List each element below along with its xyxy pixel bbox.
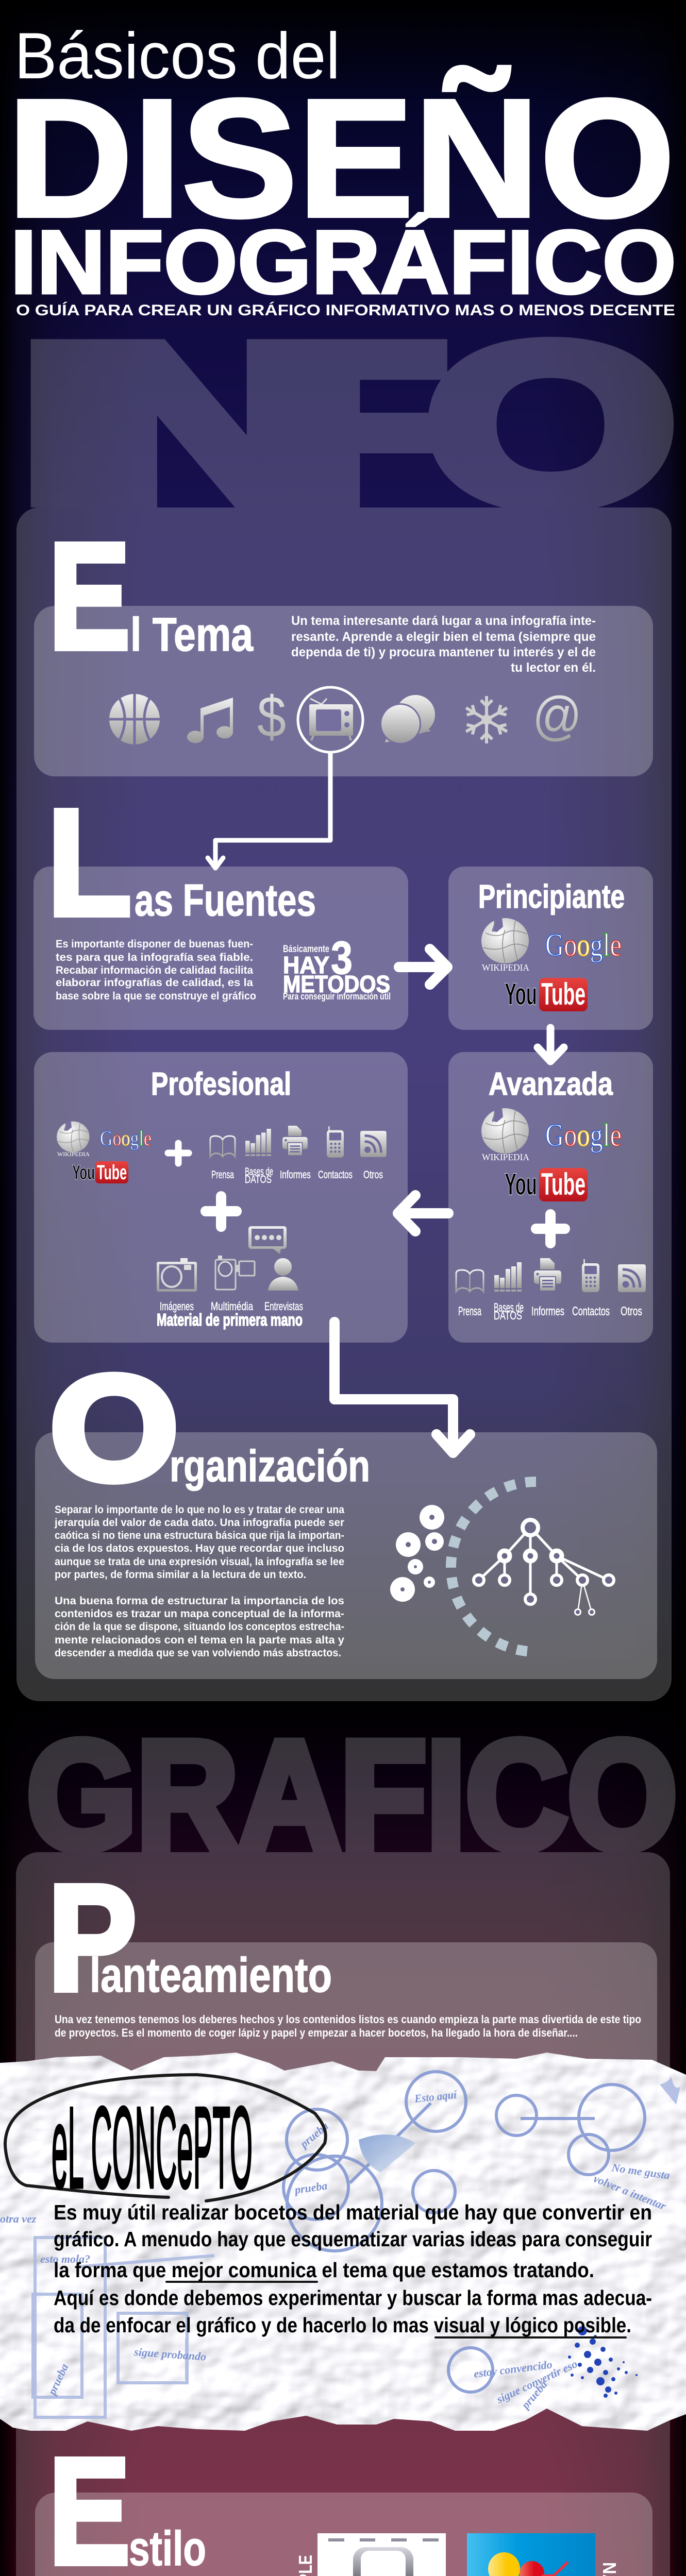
heading: el concepto with hand-drawn outline (5, 2075, 326, 2212)
panel: estilo (35, 2426, 652, 2576)
text: el tema description (291, 614, 596, 675)
labels: sources row: Otros (363, 1169, 383, 1181)
arrow: profesional to organización (334, 1322, 470, 1453)
labels: sources row (211, 1166, 383, 1185)
text: fuentes description: tes para que la infografía sea fiable. (56, 952, 253, 963)
text: organización paragraphs: contenidos es trazar un mapa conceptual de la informa- (55, 1608, 344, 1620)
text: organización paragraphs: por partes, de forma similar a la lectura de un texto. (55, 1569, 306, 1581)
text: organización paragraphs: cia de los datos expuestos. Hay que recordar que incluso (55, 1543, 344, 1554)
text: organización paragraphs: mente relacionados con el tema en la parte mas alta y (55, 1634, 344, 1646)
callout: hay 3 metodos (283, 933, 391, 1002)
heading: El Tema: E (48, 511, 130, 681)
title line: DISEÑO: DISEÑO (7, 64, 675, 252)
text: el tema description: dependa de ti) y procura mantener tu interés y el de (291, 645, 596, 659)
heading: Las Fuentes: as Fuentes (135, 875, 316, 925)
ghost heading: INFO: F (301, 298, 448, 551)
template: apple (295, 2533, 446, 2576)
heading: Las Fuentes (47, 777, 316, 947)
subtitle: O GUÍA PARA CREAR UN GRÁFICO INFORMATIVO MAS O MENOS DECENTE (16, 301, 675, 319)
labels: sources row: Informes (531, 1304, 564, 1318)
sketches: handwritten notes: Esto aquí (413, 2088, 458, 2105)
logo: youtube (505, 977, 588, 1011)
panel: crumpled paper sheet (0, 2053, 686, 2431)
diagram: scattered data circles (390, 1505, 444, 1602)
labels: sources row (458, 1301, 642, 1322)
sketches: handwritten notes: No me gusta (610, 2161, 671, 2182)
arrow: tema to fuentes (208, 753, 330, 868)
labels: sources row: Contactos (572, 1304, 610, 1318)
heading: Organización (49, 1345, 370, 1512)
icons: sources row (210, 1126, 387, 1158)
logo: google: Google (100, 1126, 152, 1150)
icon: video camera (215, 1256, 255, 1290)
labels: sources row: DATOS (494, 1309, 522, 1322)
sketches: handwritten notes: prueba (293, 2179, 328, 2196)
labels: sources row: Informes (280, 1169, 311, 1181)
text: fuentes description: base sobre la que se construye el gráfico (56, 990, 256, 1002)
sketches: ink splatter (568, 2326, 638, 2398)
panel: avanzada (448, 1052, 653, 1343)
logo: wikipedia: WIKIPEDIA (482, 1152, 529, 1162)
labels: first-hand material: Multimédia (211, 1300, 254, 1313)
heading: profesional: Profesional (151, 1066, 291, 1102)
logo: youtube: Tube (97, 1161, 127, 1184)
arrow: fuentes to principiante (399, 949, 447, 985)
sketches: handwritten notes: prueba (45, 2362, 71, 2398)
labels: sources row: Prensa (458, 1304, 481, 1318)
icon: speech bubble (248, 1226, 287, 1254)
sketches: handwritten notes: prueba (297, 2120, 331, 2151)
labels: first-hand material (157, 1300, 303, 1329)
logo: wikipedia: WIKIPEDIA (57, 1150, 90, 1158)
ghost heading: INFO (31, 337, 674, 507)
text: el tema description: resante. Aprende a elegir bien el tema (siempre que (291, 630, 596, 644)
logo: wikipedia (481, 918, 529, 973)
text: organización paragraphs: jerarquía del valor de cada dato. Una infografía puede ser (54, 1517, 344, 1529)
labels: first-hand material: Material de primera mano (157, 1310, 303, 1329)
arrow: principiante to avanzada (538, 1028, 564, 1061)
logo: youtube: You (505, 977, 537, 1011)
text: organización paragraphs: Separar lo importante de lo que no lo es y tratar de crear una (55, 1504, 344, 1516)
heading: Estilo: stilo (129, 2521, 206, 2576)
logo: youtube: Tube (541, 1167, 585, 1201)
ghost heading: INFO: N (79, 298, 325, 551)
panel: profesional (34, 1052, 408, 1343)
panel: principiante (448, 867, 653, 1030)
text: el tema description: tu lector en él. (511, 660, 596, 675)
text: organización paragraphs: aunque se trata de una expresión visual, la infografía se lee (55, 1556, 344, 1568)
labels: sources row: Bases de (494, 1301, 524, 1315)
heading: principiante: Principiante (478, 878, 625, 915)
callout: hay 3 metodos: Para conseguir información útil (283, 991, 391, 1002)
icon: speech bubbles (380, 695, 435, 744)
icons: sources row (456, 1258, 646, 1292)
sketches: handwritten notes: sigue convertir eso (494, 2357, 579, 2406)
heading: avanzada: Avanzada (489, 1066, 613, 1102)
text: organización paragraphs: ción de la que se dispone, situando los conceptos estrecha- (55, 1621, 344, 1633)
sketches: handwritten notes: otra vez (0, 2212, 37, 2225)
heading: El Tema: l Tema (130, 608, 254, 661)
diagram: hierarchy tree (474, 1520, 614, 1615)
text: el tema description: Un tema interesante dará lugar a una infografía inte- (291, 614, 596, 628)
icon: snowflake (463, 696, 510, 743)
text: fuentes description (56, 938, 256, 1002)
text: fuentes description: elaborar infografías de calidad, es la (56, 977, 253, 989)
panel: organización (35, 1345, 657, 1679)
logo: google: Google (545, 1118, 622, 1153)
panel: planteamiento (35, 1853, 657, 2087)
panel: grafico outer container (16, 1852, 670, 2576)
labels: first-hand material: Imágenes (160, 1300, 194, 1313)
arrow: avanzada to profesional (398, 1195, 448, 1231)
icon: basketball (109, 694, 160, 744)
text: organización paragraphs: Una buena forma de estructurar la importancia de los (55, 1595, 344, 1607)
panel: el tema (34, 511, 653, 776)
logo: youtube: You (72, 1161, 95, 1184)
panel: info outer container (16, 507, 672, 1701)
text: organización paragraphs: descender a medida que se van volviendo más abstractos. (55, 1647, 341, 1659)
heading: Las Fuentes: L (47, 777, 132, 947)
logo: youtube: Tube (541, 977, 585, 1011)
heading: Organización: O (49, 1345, 179, 1512)
text: organización paragraphs: caótica si no tiene una estructura básica que rija la importan- (55, 1530, 344, 1541)
diagram: dashed arc (451, 1482, 536, 1652)
ghost heading: INFO: O (426, 298, 676, 551)
callout: hay 3 metodos: HAY (283, 952, 329, 978)
callout: hay 3 metodos: 3 (331, 933, 353, 984)
sketches: handwritten notes: prueba (518, 2378, 550, 2412)
icon: dollar: $ (257, 685, 286, 749)
icon: person (268, 1258, 298, 1291)
icon: big plus (206, 1196, 237, 1227)
labels: sources row: Otros (621, 1304, 642, 1318)
sketches: handwritten notes (0, 2088, 671, 2412)
logo: wikipedia (481, 1108, 529, 1162)
labels: first-hand material: Entrevistas (264, 1300, 303, 1313)
sketches: blue pencil marks (33, 2072, 680, 2417)
heading: Estilo (48, 2426, 206, 2576)
labels: sources row: Bases de (245, 1166, 273, 1178)
icon: plus (536, 1214, 565, 1243)
icon: television highlighted (298, 687, 363, 752)
panel: las fuentes (34, 777, 408, 1030)
template: naif (467, 2533, 620, 2576)
labels: sources row: DATOS (245, 1174, 272, 1185)
heading: Organización: rganización (170, 1442, 370, 1491)
callout: hay 3 metodos: Básicamente (283, 944, 329, 955)
labels: sources row: Prensa (211, 1169, 234, 1181)
title line: Básicos del: Básicos del (14, 19, 340, 92)
heading: Planteamiento (47, 1853, 332, 2023)
ghost heading: INFO: I (21, 298, 103, 551)
sketches: handwritten notes: estoy convencido (473, 2358, 553, 2380)
logo: youtube: You (505, 1167, 537, 1201)
logo: youtube (505, 1167, 588, 1201)
heading: Planteamiento: P (47, 1853, 137, 2023)
logo: google: Google (545, 928, 622, 963)
heading: Planteamiento: lanteamiento (90, 1948, 332, 2003)
callout: hay 3 metodos: METODOS (283, 971, 390, 997)
icon: at sign: @ (532, 686, 582, 746)
text: planteamiento intro (55, 2013, 641, 2039)
text: organización paragraphs (54, 1504, 344, 1659)
icon: plus (168, 1143, 189, 1163)
sketches: handwritten notes: volver a intentar (592, 2172, 668, 2213)
sketches: handwritten notes: sigue probando (133, 2345, 207, 2363)
title line: INFOGRÁFICO: INFOGRÁFICO (10, 212, 676, 313)
icon: music note (187, 698, 233, 743)
sketches: handwritten notes: esto mola? (40, 2252, 90, 2265)
text: fuentes description: Es importante disponer de buenas fuen- (56, 938, 253, 950)
icon: camera (157, 1258, 197, 1292)
logo: wikipedia: WIKIPEDIA (482, 962, 529, 973)
labels: sources row: Contactos (318, 1169, 353, 1181)
logo: wikipedia (57, 1121, 90, 1158)
text: planteamiento intro: de proyectos. Es el momento de coger lápiz y papel y empezar a hacer bocetos, ha llegado la hora de diseñar.... (55, 2026, 578, 2039)
logo: youtube (72, 1161, 128, 1184)
title (7, 19, 676, 319)
text: fuentes description: Recabar información de calidad facilita (56, 964, 253, 976)
heading: El Tema (48, 511, 254, 681)
text: concepto body: la forma que mejor comunica el tema que estamos tratando. (54, 2258, 594, 2282)
text: concepto body (54, 2200, 652, 2337)
